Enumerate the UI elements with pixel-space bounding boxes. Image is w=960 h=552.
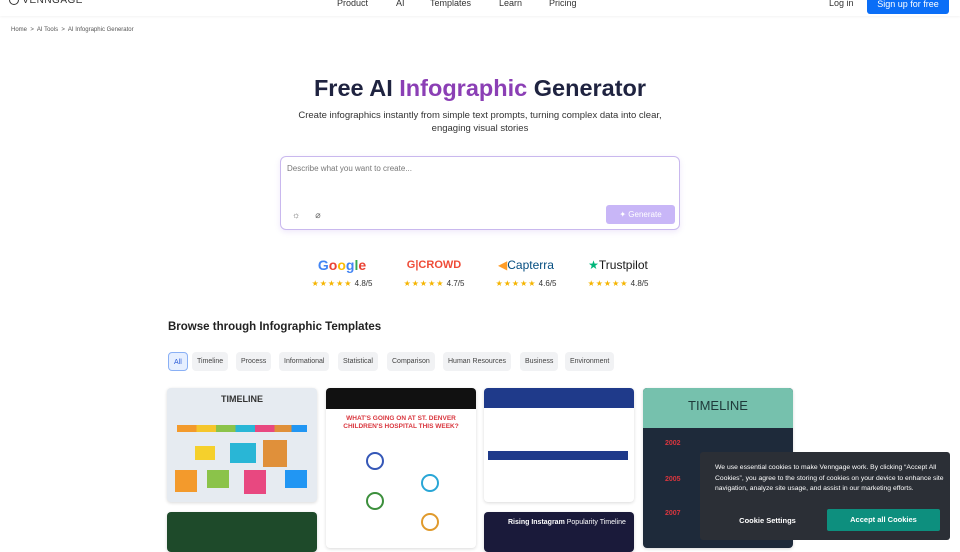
text: ★★★★★ 4.8/5 [312, 279, 372, 288]
subtitle: Create infographics instantly from simple text prompts, turning complex data into clear, engaging visual stories [298, 110, 662, 134]
card: hospital: WHAT'S GOING ON AT ST. DENVER CHILDREN'S HOSPITAL THIS WEEK? [343, 415, 459, 430]
filter chips [168, 352, 614, 371]
card: fundraising [484, 388, 634, 502]
icons: ☼ ⌀ [292, 210, 321, 220]
text: Timeline [197, 358, 223, 365]
text: ★★★★★ 4.7/5 [404, 279, 464, 288]
card: hospital [326, 388, 476, 548]
text: Environment [570, 358, 609, 365]
text: G|CROWD [407, 259, 461, 271]
card: timeline: TIMELINE [221, 394, 263, 404]
card: dark timeline: TIMELINE [688, 398, 748, 413]
section heading: Browse through Infographic Templates [168, 321, 381, 333]
text: Google [318, 257, 366, 273]
text: Process [241, 358, 266, 365]
text: Informational [284, 358, 324, 365]
text: Statistical [343, 358, 373, 365]
text: ★★★★★ 4.8/5 [588, 279, 648, 288]
card: timeline [167, 388, 317, 502]
breadcrumb: Home > AI Tools > AI Infographic Generator [11, 27, 134, 33]
cookie banner [700, 452, 950, 540]
card: dark timeline: 2007 [665, 510, 681, 517]
nav links [337, 0, 854, 8]
card: dark timeline [643, 388, 793, 548]
card: instagram [484, 512, 634, 552]
cookie banner: We use essential cookies to make Venngage work. By clicking “Accept All Cookies”, you agree to the storing of cookies on your device to enhance site navigation, analyze site usage, and assist in our marketing efforts. [715, 464, 944, 492]
title: Free AI Infographic Generator [314, 75, 646, 101]
signup button [867, 0, 949, 14]
text: Comparison [392, 358, 430, 365]
accept button [827, 509, 940, 531]
text: ◀Capterra [498, 258, 554, 272]
ratings [312, 257, 648, 288]
card: instagram: Rising Instagram Popularity Timeline [508, 519, 626, 526]
card: forest [167, 512, 317, 552]
card: dark timeline: 2005 [665, 476, 681, 483]
card: dark timeline: 2002 [665, 440, 681, 447]
text: ★★★★★ 4.6/5 [496, 279, 556, 288]
text: Human Resources [448, 358, 506, 365]
text: ★Trustpilot [588, 258, 648, 272]
text: Business [525, 358, 553, 365]
prompt box: Describe what you want to create... [287, 164, 412, 173]
cookie settings: Cookie Settings [739, 516, 796, 525]
accept button: Accept all Cookies [850, 515, 917, 524]
header [0, 0, 960, 16]
prompt box [280, 156, 680, 230]
generate button [606, 205, 675, 224]
generate button: ✦ Generate [619, 210, 662, 219]
text: All [174, 359, 182, 366]
